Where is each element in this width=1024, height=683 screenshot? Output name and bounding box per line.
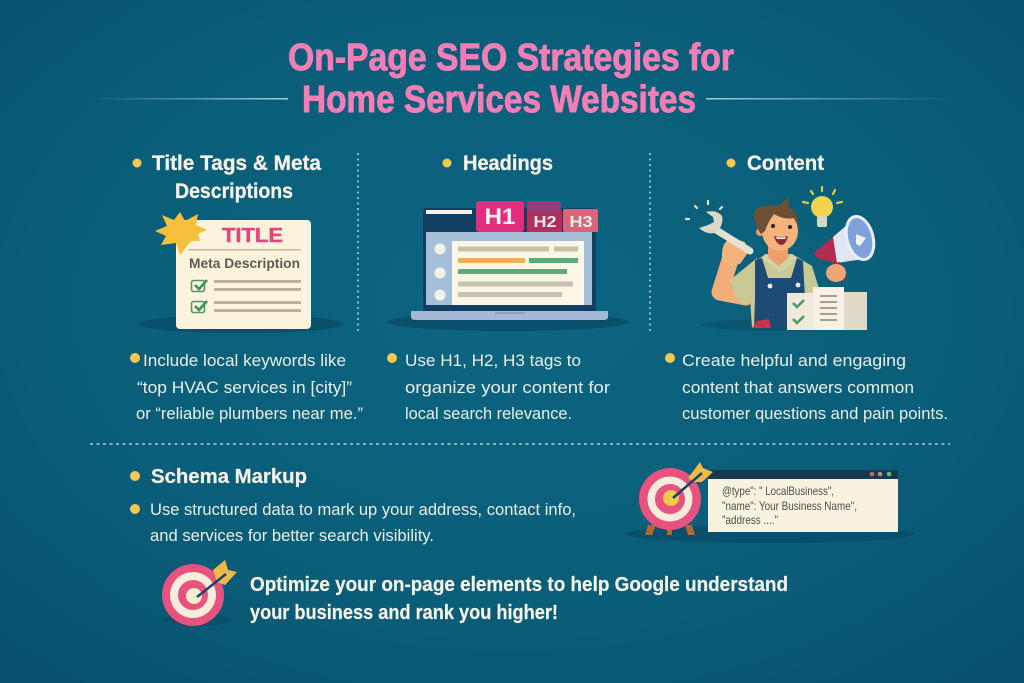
heading: title tags: Title Tags & Meta [152, 151, 322, 175]
icon: title card [139, 212, 343, 333]
icon: title card: TITLE [222, 225, 283, 247]
text block: content: content that answers common [682, 378, 914, 397]
bulb [811, 196, 833, 218]
icon: title card: Meta Description [189, 255, 300, 271]
text block: schema markup: Use structured data to mark up your address, contact info, [150, 500, 576, 519]
text block: headings: Use H1, H2, H3 tags to [405, 351, 581, 370]
callout text: Optimize your on-page elements to help Google understand [250, 574, 788, 596]
icon: target and code window [625, 462, 915, 543]
hand [722, 238, 747, 266]
icon: worker with wrench and megaphone [686, 187, 878, 331]
text block: content [665, 351, 948, 423]
icon: target and code window: "address ...." [722, 513, 778, 527]
column dividers [90, 153, 950, 444]
text block: title tags: or “reliable plumbers near me.” [136, 404, 363, 423]
icon: target and code window: "name": Your Business Name", [722, 499, 857, 513]
icon: target and code window: @type": " LocalBusiness", [722, 484, 834, 498]
panel: content [665, 151, 948, 423]
icon: laptop with heading tags: H3 [570, 214, 593, 231]
title [288, 37, 734, 121]
overalls [754, 258, 806, 328]
text block: content: Create helpful and engaging [682, 351, 906, 370]
heading: title tags: Descriptions [175, 179, 293, 203]
text block: title tags: “top HVAC services in [city]” [137, 378, 352, 397]
text block: headings [387, 351, 610, 423]
megaphone [815, 237, 837, 263]
panel: schema markup [130, 462, 915, 545]
callout [162, 560, 788, 626]
sleeve [730, 258, 766, 305]
heading: title tags [132, 151, 322, 203]
icon: target [162, 560, 237, 626]
neck and head [768, 242, 788, 266]
icon: laptop with heading tags: H1 [484, 204, 516, 229]
text block: title tags [130, 351, 363, 423]
panel: title tags [130, 151, 363, 423]
panel: headings [387, 151, 629, 423]
title: On-Page SEO Strategies for [288, 37, 734, 79]
callout text [250, 574, 788, 624]
text block: headings: organize your content for [405, 378, 610, 397]
callout text: your business and rank you higher! [250, 602, 558, 624]
heading: schema markup: Schema Markup [151, 466, 307, 488]
wrench [713, 228, 750, 251]
icon: laptop with heading tags [387, 201, 629, 331]
heading: headings: Headings [463, 151, 553, 175]
text block: title tags: Include local keywords like [143, 351, 346, 370]
title: Home Services Websites [302, 79, 696, 121]
shirt torso [748, 254, 822, 328]
icon: laptop with heading tags: H2 [534, 214, 557, 231]
heading: content: Content [747, 151, 824, 175]
text block: content: customer questions and pain points. [682, 404, 948, 423]
raised arm [720, 254, 746, 297]
documents [787, 293, 813, 330]
text block: schema markup: and services for better search visibility. [150, 526, 434, 545]
text block: headings: local search relevance. [405, 404, 572, 423]
text block: schema markup [130, 500, 576, 545]
